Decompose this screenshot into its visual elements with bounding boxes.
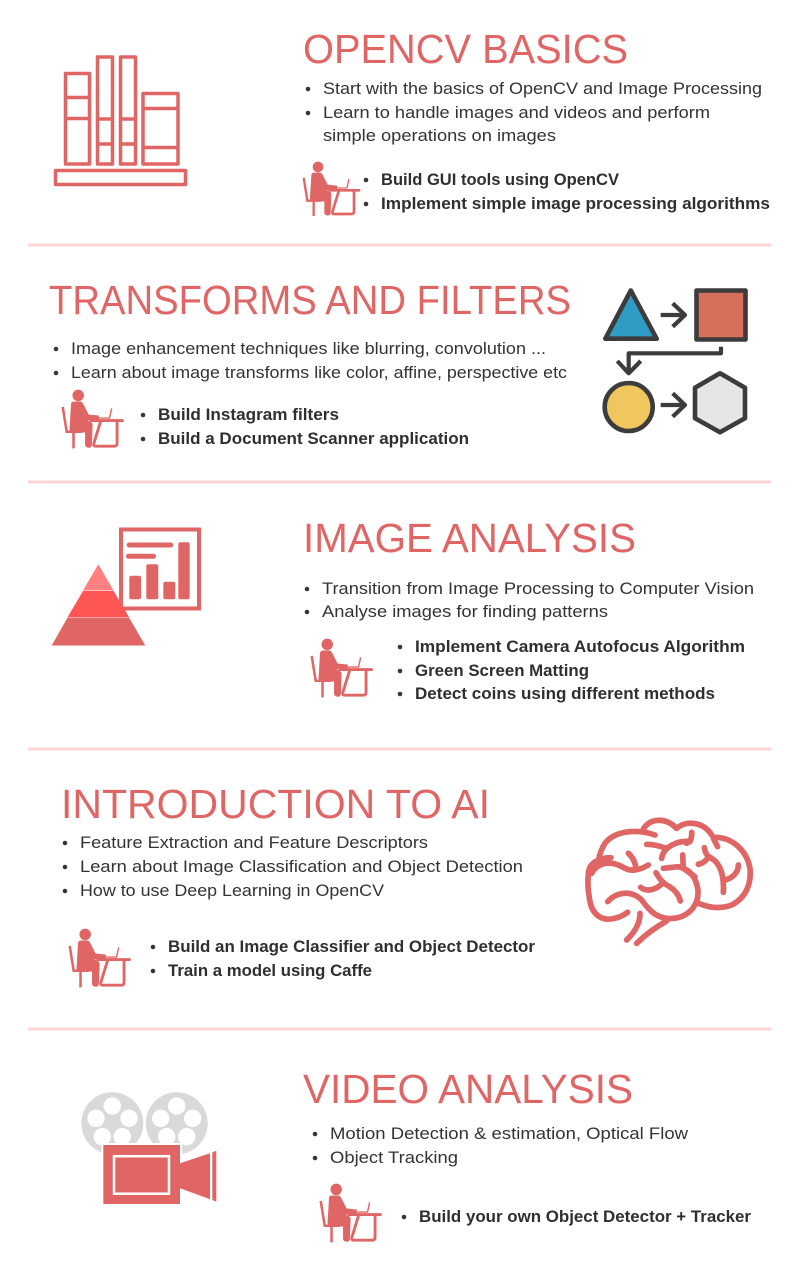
heading: transforms and filters: TRANSFORMS AND FILTERS xyxy=(49,277,571,323)
icon: film camera xyxy=(81,1092,216,1206)
bullet list: video topics: Object Tracking xyxy=(330,1148,458,1167)
icon: person at desk xyxy=(63,390,122,448)
project list: analysis: Green Screen Matting xyxy=(415,661,589,680)
project list: AI: Train a model using Caffe xyxy=(168,961,372,980)
project list: AI: Build an Image Classifier and Object Detector xyxy=(168,937,535,956)
icon: person at desk xyxy=(304,162,359,216)
bullet list: transforms topics: Image enhancement techniques like blurring, convolution ... xyxy=(71,339,546,358)
panel: OpenCV basics xyxy=(56,26,770,216)
bullet list: basics topics: simple operations on images xyxy=(323,126,556,145)
bullet list: transforms topics: Learn about image transforms like color, affine, perspective etc xyxy=(71,363,568,382)
bullet list: AI topics: How to use Deep Learning in OpenCV xyxy=(80,881,385,900)
bullet list: basics topics xyxy=(306,79,762,145)
bullet list: AI topics: Learn about Image Classification and Object Detection xyxy=(80,857,523,876)
project list: transforms: Build Instagram filters xyxy=(158,405,339,424)
project list: video: Build your own Object Detector + Tracker xyxy=(419,1207,751,1226)
project list: AI xyxy=(151,937,535,980)
bullet list: analysis topics: Analyse images for finding patterns xyxy=(322,602,608,621)
panel: transforms and filters xyxy=(49,277,746,448)
project list: transforms: Build a Document Scanner application xyxy=(158,429,469,448)
bullet list: analysis topics xyxy=(305,579,754,621)
icon: person at desk xyxy=(70,929,129,987)
bullet list: video topics: Motion Detection & estimation, Optical Flow xyxy=(330,1124,689,1143)
heading: video analysis: VIDEO ANALYSIS xyxy=(303,1066,633,1112)
heading: OpenCV basics: OPENCV BASICS xyxy=(303,26,628,72)
icon: shapes flow diagram xyxy=(605,290,746,432)
project list: transforms xyxy=(141,405,469,448)
bullet list: AI topics: Feature Extraction and Feature Descriptors xyxy=(80,833,428,852)
project list: basics: Build GUI tools using OpenCV xyxy=(381,170,620,189)
panel: introduction to AI xyxy=(61,781,750,987)
bullet list: AI topics xyxy=(63,833,523,900)
icon: person at desk xyxy=(312,639,371,697)
panel: image analysis xyxy=(52,515,754,703)
panel: video analysis xyxy=(81,1066,751,1242)
project list: basics: Implement simple image processing algorithms xyxy=(381,194,770,213)
bullet list: analysis topics: Transition from Image Processing to Computer Vision xyxy=(322,579,754,598)
bullet list: basics topics: Learn to handle images and videos and perform xyxy=(323,103,710,122)
icon: books on a shelf xyxy=(56,57,186,184)
project list: basics xyxy=(364,170,770,213)
icon: brain xyxy=(588,820,750,943)
bullet list: transforms topics xyxy=(54,339,568,382)
bullet list: basics topics: Start with the basics of OpenCV and Image Processing xyxy=(323,79,762,98)
project list: analysis xyxy=(398,637,745,703)
project list: analysis: Implement Camera Autofocus Algorithm xyxy=(415,637,745,656)
bullet list: video topics xyxy=(313,1124,689,1167)
heading: image analysis: IMAGE ANALYSIS xyxy=(303,515,636,561)
icon: person at desk xyxy=(321,1184,380,1242)
heading: introduction to AI: INTRODUCTION TO AI xyxy=(61,781,490,827)
project list: analysis: Detect coins using different methods xyxy=(415,684,715,703)
icon: pyramid and bar chart xyxy=(52,530,199,646)
